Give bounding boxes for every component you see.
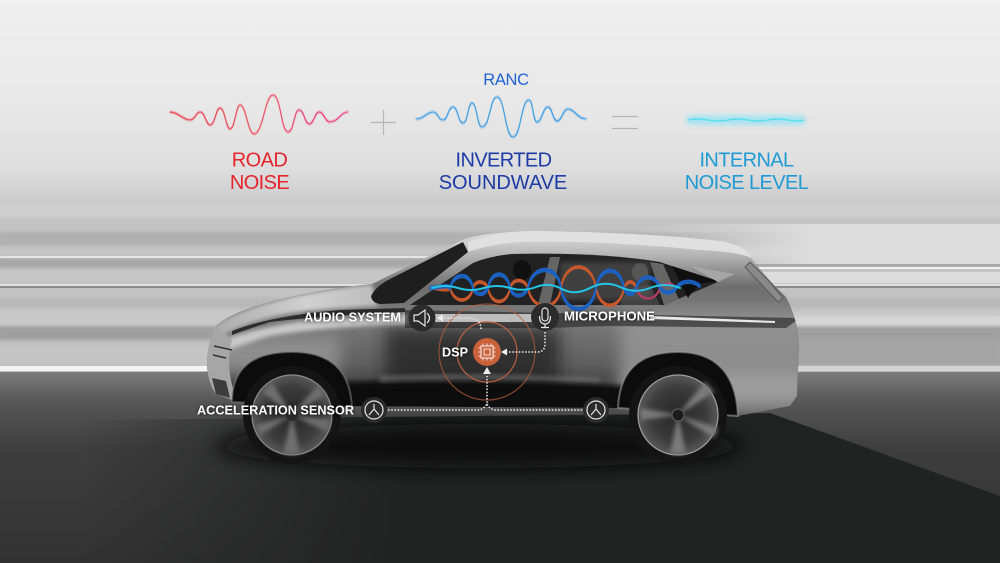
plus sign	[371, 110, 396, 135]
car	[200, 231, 810, 464]
heading: road noise: ROAD	[232, 150, 287, 172]
icon: microphone	[531, 303, 559, 331]
label: microphone: MICROPHONE	[564, 308, 655, 324]
front wheel arch	[232, 352, 352, 408]
roof highlight	[468, 232, 751, 258]
rear wheel arch	[618, 352, 738, 416]
RANC label: RANC	[483, 71, 529, 89]
rear pillar glass strip	[745, 262, 783, 302]
label: acceleration sensor: ACCELERATION SENSOR	[197, 402, 355, 418]
background: blurred motion sky	[0, 0, 1000, 374]
heading: inverted soundwave: SOUNDWAVE	[439, 172, 567, 194]
label: audio system: AUDIO SYSTEM	[304, 310, 401, 324]
top equation: road noise wave	[170, 94, 348, 135]
icon: left acceleration sensor	[361, 397, 387, 423]
front fascia	[207, 326, 238, 402]
label: DSP: DSP	[442, 344, 468, 360]
fender sweep dark line	[232, 308, 405, 335]
side windows	[410, 254, 718, 305]
icon: speaker	[408, 304, 436, 332]
top equation: inverted wave	[416, 96, 586, 138]
arrowheads	[437, 314, 507, 374]
road surface	[0, 366, 1000, 563]
equals sign	[612, 116, 638, 128]
heading: road noise: NOISE	[230, 172, 289, 194]
sound waves in the cabin	[430, 266, 700, 310]
icon: DSP chip	[473, 338, 501, 366]
shoulder highlight	[228, 312, 410, 352]
windshield	[371, 242, 468, 304]
rear wheel	[629, 366, 727, 464]
heading: inverted soundwave: INVERTED	[456, 150, 552, 172]
front wheel	[243, 366, 341, 464]
heading: internal noise level: NOISE LEVEL	[685, 172, 809, 194]
soft body shading	[200, 284, 810, 420]
DSP rings	[439, 304, 535, 400]
beltline stripe	[405, 310, 800, 328]
car body	[207, 231, 799, 416]
signal dotted lines	[388, 318, 583, 410]
icon: right acceleration sensor	[583, 397, 609, 423]
top equation: flattened wave	[686, 115, 806, 125]
hood	[212, 284, 380, 336]
heading: internal noise level: INTERNAL	[699, 150, 794, 172]
